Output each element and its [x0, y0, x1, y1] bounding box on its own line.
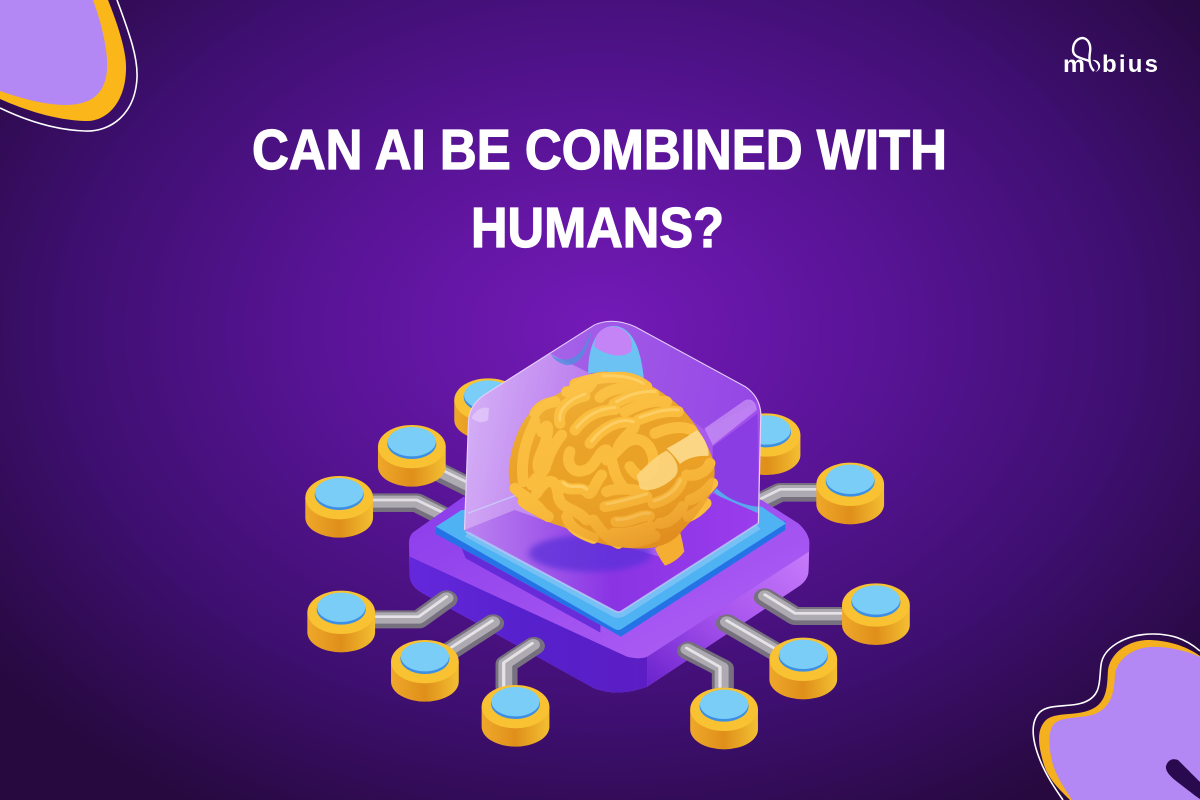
- logo: bius: [1102, 51, 1158, 78]
- decorative blob: top left: [0, 0, 137, 131]
- title: [252, 118, 947, 260]
- chip base: [409, 497, 809, 692]
- wires behind chip: [362, 467, 819, 518]
- rear nodes: [305, 378, 884, 538]
- dome body: [464, 321, 761, 612]
- brain gyri highlights: [560, 376, 681, 519]
- logo: m: [1063, 51, 1085, 77]
- dome floor: [464, 493, 758, 612]
- brain silhouette: [509, 372, 715, 548]
- reflected blue mound: [588, 326, 644, 382]
- title: CAN AI BE COMBINED WITH: [252, 118, 947, 182]
- brain stem: [655, 532, 684, 566]
- logo mark: loop: [1073, 38, 1094, 71]
- right reflection: [704, 400, 757, 445]
- dome top face: [549, 321, 758, 430]
- illustration: AI chip with brain: [305, 321, 910, 749]
- brain shading: [509, 372, 715, 548]
- dome edge highlights: [464, 321, 761, 530]
- front wires: [362, 595, 843, 687]
- brain gloss: [637, 451, 678, 490]
- front nodes: [307, 583, 910, 749]
- logo: [1063, 38, 1158, 78]
- glass dome: [464, 321, 761, 615]
- title: HUMANS?: [471, 196, 724, 260]
- decorative blob: bottom right: [1033, 634, 1200, 800]
- blue plate: [436, 507, 786, 637]
- frosted glass rim on plate: [467, 527, 758, 615]
- glass glint: [472, 408, 489, 422]
- brain gyri: [515, 377, 713, 543]
- brain: [509, 372, 715, 566]
